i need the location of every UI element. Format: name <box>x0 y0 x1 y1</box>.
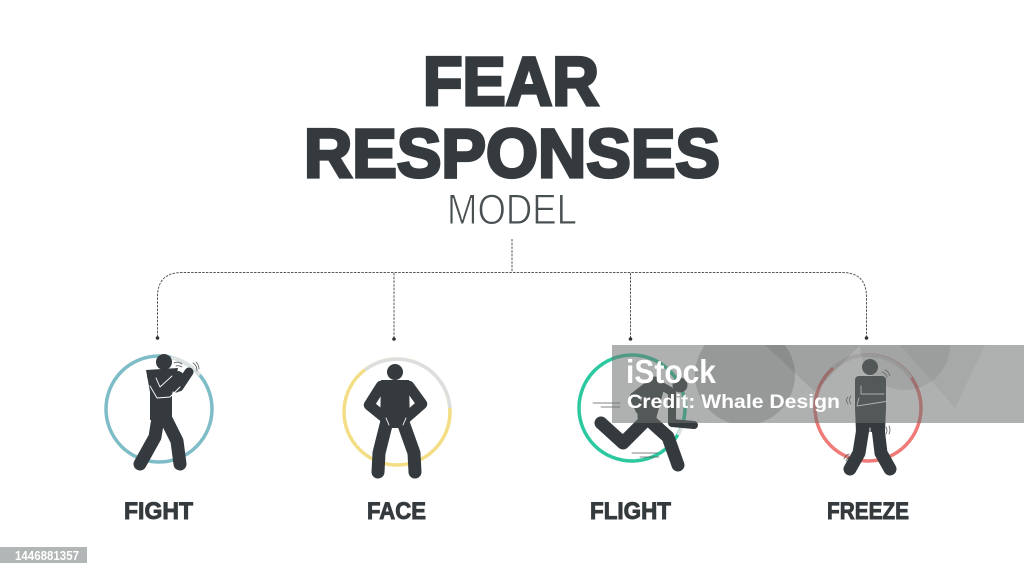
connector tree <box>156 239 868 341</box>
panel: face <box>344 359 450 525</box>
panel: freeze <box>815 355 921 525</box>
image id tag <box>0 547 87 563</box>
watermark credit: Credit: Whale Design <box>627 392 840 413</box>
label: fight: FIGHT <box>124 498 193 525</box>
panel: flight <box>579 355 694 525</box>
title <box>304 43 720 192</box>
icon: face ring <box>344 359 450 465</box>
watermark logo: iStock <box>626 353 717 390</box>
icon: freeze ring <box>815 355 921 461</box>
icon: running figure <box>593 378 694 465</box>
panel: fight <box>106 354 212 525</box>
icon: fighter figure <box>140 354 199 464</box>
label: face: FACE <box>367 498 426 525</box>
title: FEAR <box>423 43 599 120</box>
label: freeze: FREEZE <box>827 498 909 525</box>
icon: standing figure <box>369 364 422 472</box>
icon: flight ring <box>579 355 685 461</box>
subtitle: model: MODEL <box>447 186 577 234</box>
watermark banner <box>612 345 1024 423</box>
icon: fight ring <box>106 356 212 462</box>
icon: freezing figure <box>844 359 890 469</box>
image id tag: 1446881357 <box>15 549 79 563</box>
label: flight: FLIGHT <box>590 498 671 525</box>
title: RESPONSES <box>304 115 720 192</box>
